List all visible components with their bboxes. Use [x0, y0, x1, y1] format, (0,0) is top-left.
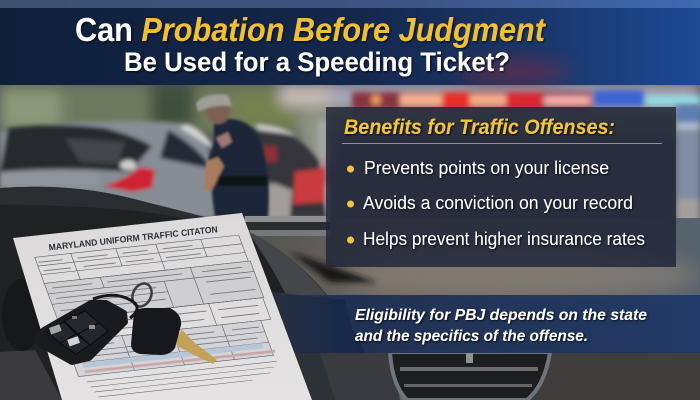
key ring: [129, 280, 155, 310]
blurred police officer: [196, 94, 269, 218]
traffic citation paper: [13, 213, 312, 400]
benefits heading: Benefits for Traffic Offenses:: [344, 116, 615, 139]
header band: [0, 8, 700, 85]
steering wheel: [0, 187, 400, 400]
dashboard: [0, 216, 700, 400]
trees and sky: [0, 84, 700, 170]
citation form fields: [35, 235, 293, 398]
panel: benefits: [326, 107, 676, 267]
eligibility note: [355, 307, 647, 345]
top strip: [0, 0, 700, 9]
right side street: [318, 105, 700, 274]
key blade: [175, 330, 217, 364]
citation title: MARYLAND UNIFORM TRAFFIC CITATON: [48, 224, 218, 252]
eligibility note: and the specifics of the offense.: [355, 328, 588, 345]
air vent: [390, 352, 550, 400]
footer note band: [262, 295, 700, 353]
bullet: prevents points: Prevents points on your license: [364, 158, 609, 178]
key head: [131, 308, 181, 355]
header red glow: [460, 60, 570, 84]
blurred second car and road: [225, 124, 330, 219]
title: [75, 11, 547, 77]
remote fob: [36, 303, 125, 362]
eligibility note: Eligibility for PBJ depends on the state: [355, 307, 647, 324]
fob loop: [93, 295, 137, 318]
bullet: insurance rates: Helps prevent higher insurance rates: [363, 229, 645, 249]
car keys: [36, 280, 217, 364]
remote buttons: [47, 311, 108, 354]
title line two: Be Used for a Speeding Ticket?: [124, 47, 510, 77]
blurred police car on the left: [0, 121, 215, 218]
title line one: Can Probation Before Judgment: [75, 11, 547, 48]
bullet: avoids conviction: Avoids a conviction on your record: [363, 193, 633, 213]
police light bar: [352, 90, 700, 110]
